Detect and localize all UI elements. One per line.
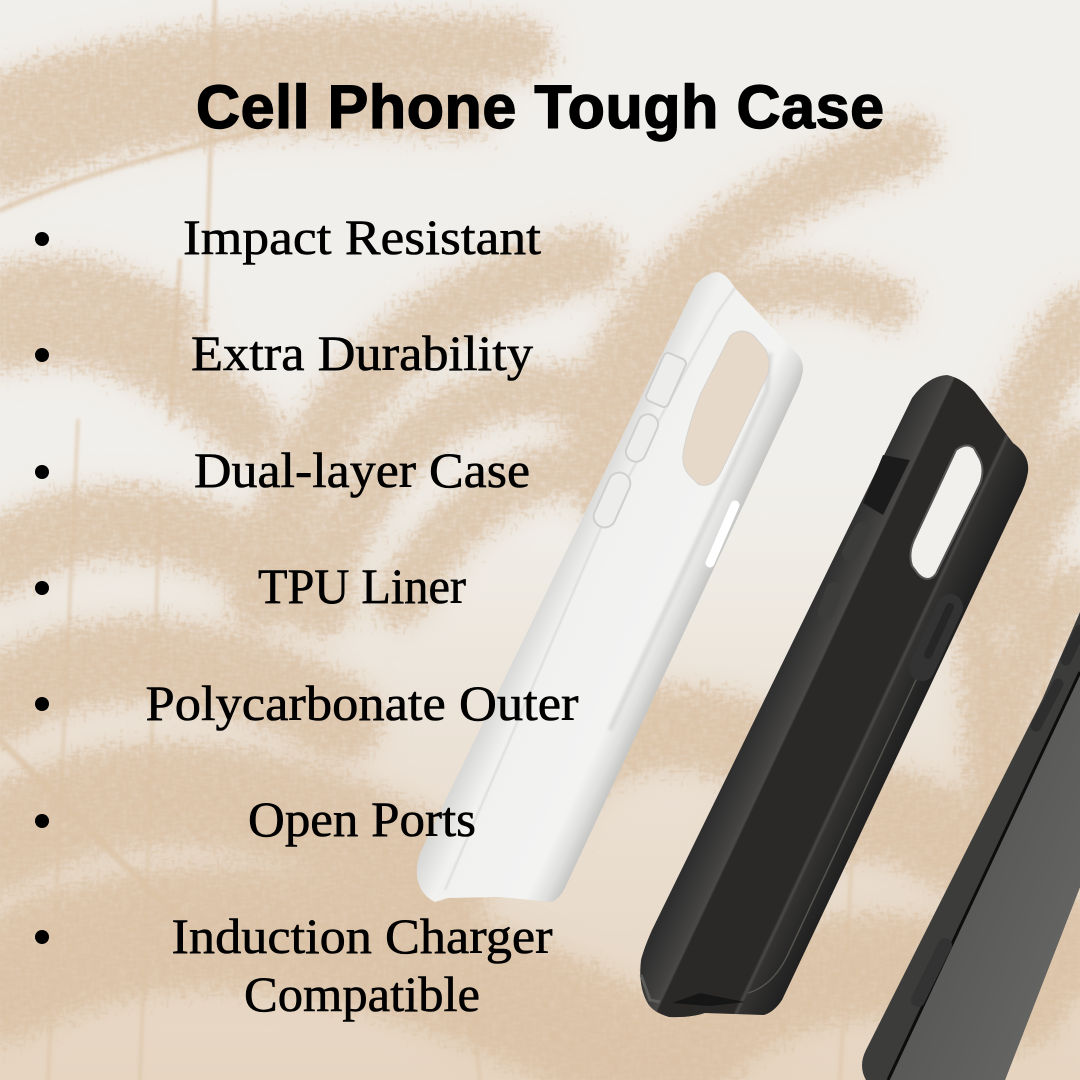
side buttons	[590, 351, 688, 531]
white slot	[710, 505, 735, 563]
list item: TPU Liner: TPU Liner	[258, 558, 466, 614]
list item: Impact Resistant: Impact Resistant	[183, 209, 541, 265]
list item: Open Ports	[35, 791, 476, 847]
list item: Impact Resistant	[35, 209, 541, 265]
slot	[863, 455, 910, 515]
camera cutout	[910, 445, 982, 579]
list item: Polycarbonate Outer: Polycarbonate Outer	[146, 675, 579, 731]
list item: Extra Durability	[35, 325, 533, 381]
black phone case	[640, 375, 1028, 1017]
list item: Dual-layer Case: Dual-layer Case	[194, 442, 530, 498]
title: Cell Phone Tough Case	[196, 73, 884, 141]
list item: Open Ports: Open Ports	[248, 791, 476, 847]
buttons	[826, 530, 950, 668]
third phone case (dark, partly cropped)	[862, 612, 1080, 1080]
list item: Induction Charger Compatible	[35, 908, 553, 1022]
feature list	[35, 209, 579, 1022]
list item: Induction Charger Compatible: Compatible	[244, 966, 480, 1022]
white phone case	[417, 272, 803, 902]
list item: TPU Liner	[35, 558, 466, 614]
camera cutout	[683, 331, 769, 485]
list item: Extra Durability: Extra Durability	[191, 325, 533, 381]
list item: Induction Charger Compatible: Induction Charger	[172, 908, 553, 964]
list item: Dual-layer Case	[35, 442, 530, 498]
